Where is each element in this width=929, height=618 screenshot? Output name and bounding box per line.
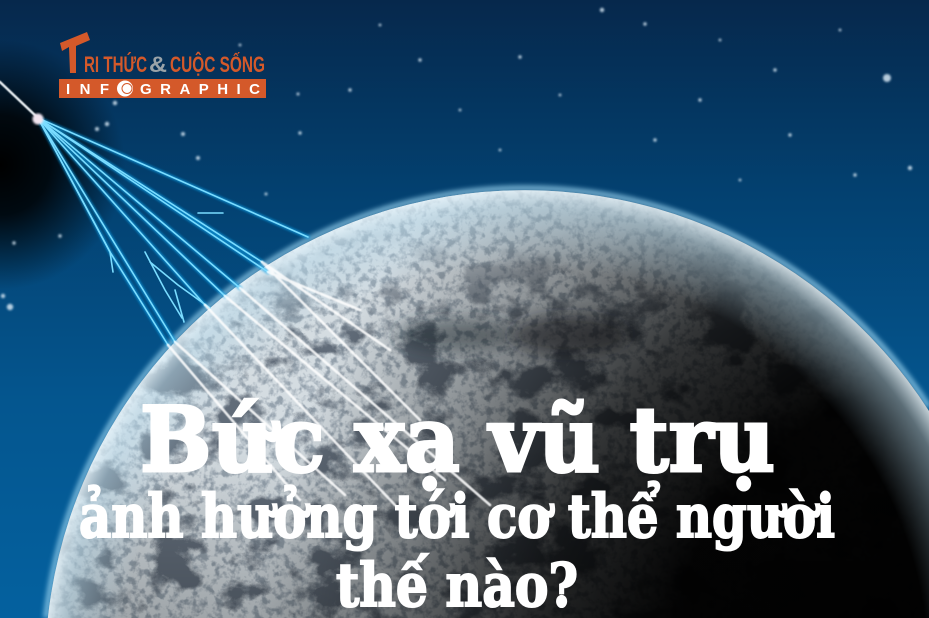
logo wordmark: RI THỨC xyxy=(84,52,147,77)
logo infographic band: INF xyxy=(66,81,109,98)
ray glow lines xyxy=(38,118,308,345)
stars xyxy=(1,8,912,310)
logo icon: T roof xyxy=(60,32,90,73)
cosmic ray shower xyxy=(0,82,490,505)
ray core lines xyxy=(38,118,308,345)
ray entry point flare xyxy=(0,82,44,124)
title line 1: Bức xạ vũ trụ xyxy=(140,387,775,493)
logo infographic band xyxy=(59,79,266,98)
logo xyxy=(59,32,266,98)
planet earth xyxy=(40,185,929,618)
logo infographic band: GRAPHIC xyxy=(140,81,260,98)
logo wordmark: & xyxy=(149,52,167,77)
title xyxy=(79,387,835,618)
planet atmosphere glow xyxy=(46,188,929,618)
rays crossing the planet xyxy=(168,262,490,505)
logo wordmark: CUỘC SỐNG xyxy=(170,51,265,77)
logo wordmark xyxy=(84,51,265,77)
